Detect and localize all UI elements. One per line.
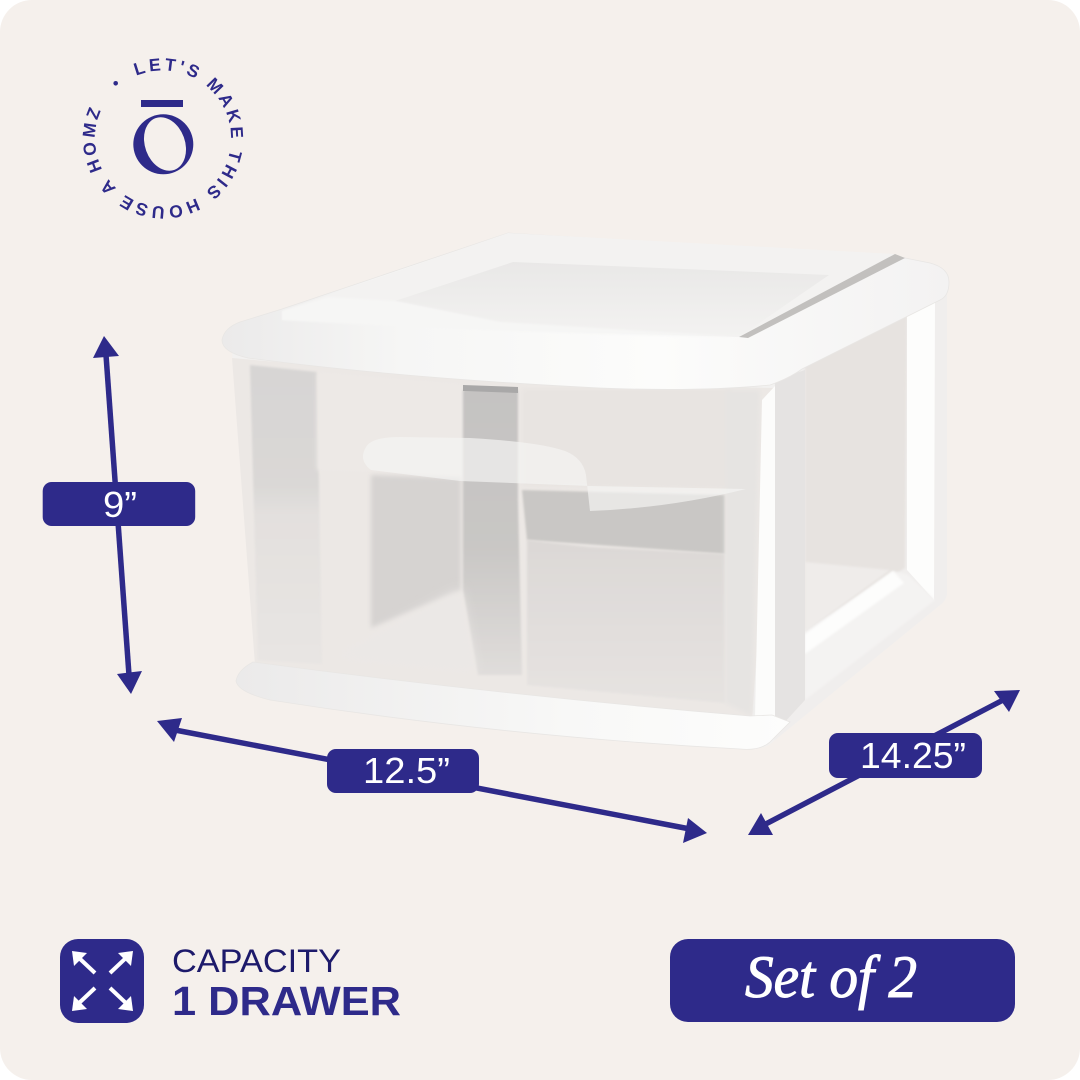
- arrow head bottom: [117, 671, 142, 694]
- bottom lip: [236, 662, 790, 749]
- arrow line: [175, 730, 690, 829]
- arrow head right: [683, 818, 707, 843]
- arrow head top: [93, 336, 119, 358]
- label pill: [327, 749, 479, 793]
- grey pillar: [772, 370, 805, 736]
- front right pillar: [755, 370, 805, 736]
- white front edge: [755, 386, 775, 722]
- depth arrow: 14.25 inches: [748, 690, 1020, 835]
- label: 14.25”: [860, 735, 966, 776]
- capacity text: [172, 943, 401, 1024]
- arrow line: [106, 355, 129, 675]
- badge text: Set of 2: [745, 944, 917, 1010]
- arrow head bottom left: [748, 813, 773, 835]
- label pill: [43, 482, 195, 526]
- logo badge: [82, 58, 244, 219]
- drawer handle: [363, 437, 746, 511]
- capacity label: CAPACITY: [172, 943, 341, 979]
- icon: expand arrows: [60, 939, 144, 1023]
- product photo: plastic drawer: [222, 233, 949, 749]
- top rim: [222, 233, 949, 389]
- drawer front panel: [232, 358, 775, 720]
- capacity value: 1 DRAWER: [172, 978, 401, 1024]
- circular slogan text: LET'S MAKE THIS HOUSE A HOMZ: [82, 58, 244, 219]
- width arrow: 12.5 inches: [157, 718, 707, 843]
- label pill: [829, 733, 982, 778]
- arrow head top right: [994, 690, 1020, 712]
- label: 12.5”: [363, 750, 450, 791]
- drawer lid: [282, 233, 905, 338]
- logo mark: [133, 100, 193, 177]
- slogan dot: [113, 81, 118, 86]
- badge background: [670, 939, 1015, 1022]
- arrow line: [762, 699, 1005, 826]
- height arrow: 9 inches: [43, 336, 195, 694]
- set badge: [670, 939, 1015, 1022]
- drawer silhouette: [232, 290, 947, 748]
- right side panel: [760, 290, 947, 740]
- label: 9”: [103, 484, 137, 525]
- arrow head left: [157, 718, 182, 742]
